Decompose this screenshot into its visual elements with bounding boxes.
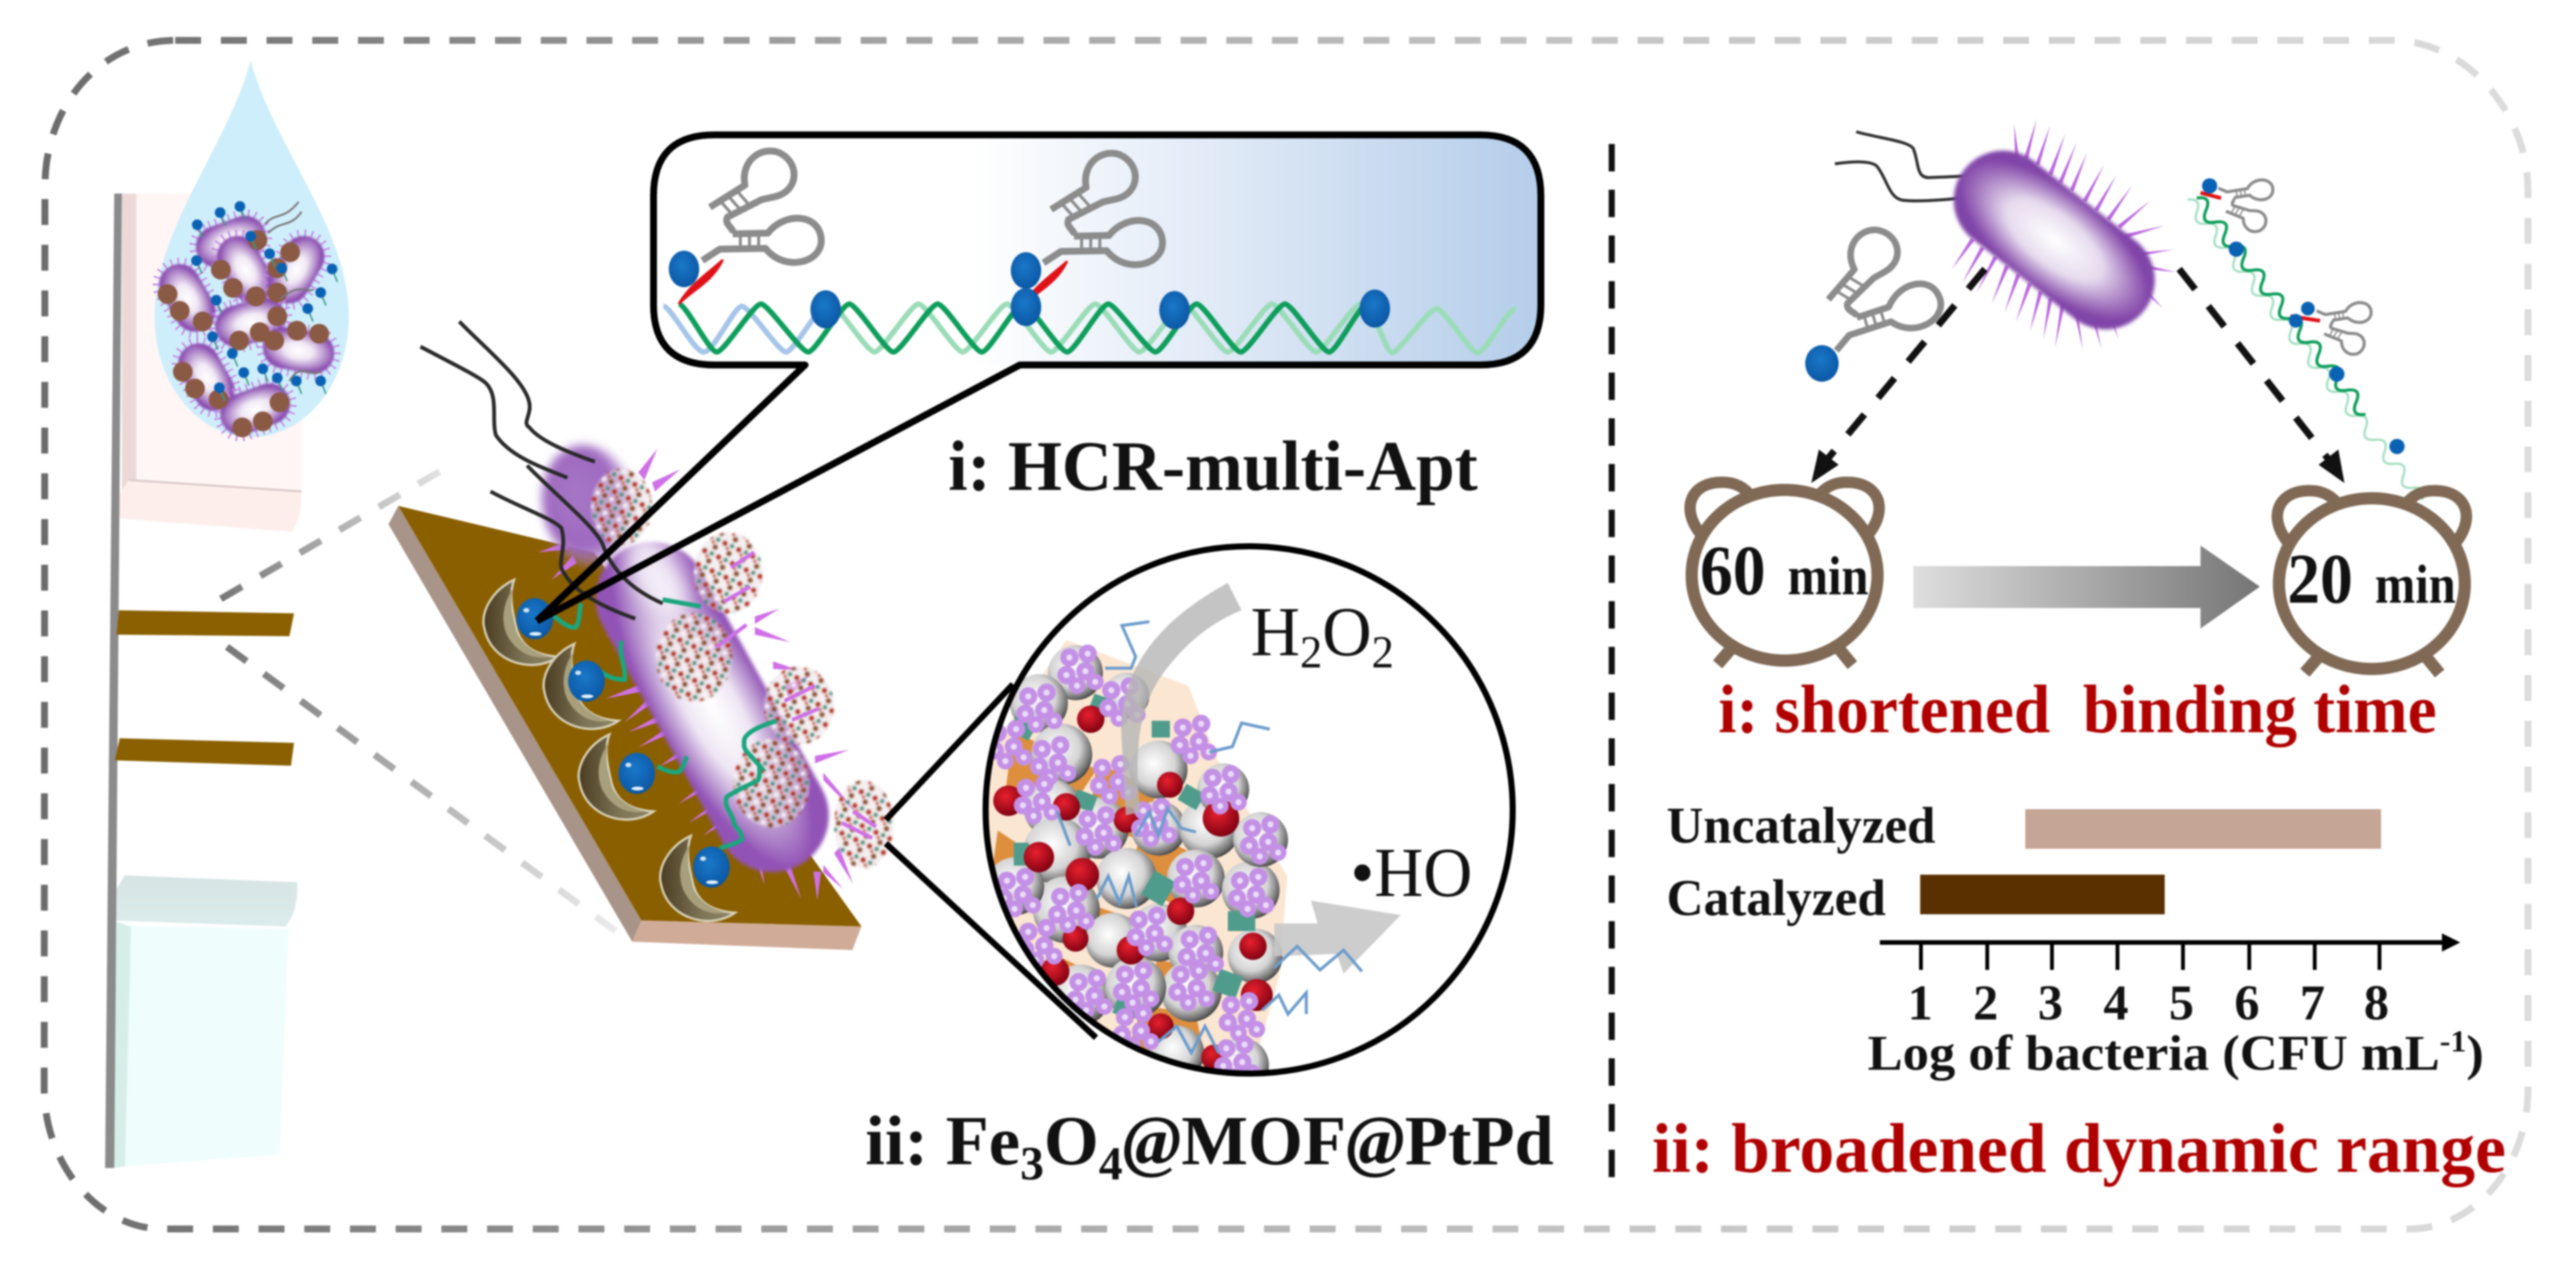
HO radical label: •HO: [1350, 834, 1472, 911]
dynamic range chart: [1667, 796, 2484, 1081]
dark DNA strand green: [679, 304, 1367, 352]
HCR multi-aptamer chain: [2183, 178, 2427, 504]
axis title: Log of bacteria (CFU mL: [1868, 1026, 2415, 1081]
min label left: min: [1788, 546, 1868, 606]
axis numbers: 4: [2104, 975, 2128, 1031]
light strand: [2183, 196, 2427, 504]
label uncatalyzed: Uncatalyzed: [1667, 796, 1935, 854]
sample pad flap: [114, 480, 302, 532]
gray progress arrow: [1913, 546, 2260, 629]
flagella: [420, 322, 663, 619]
callout fill: [654, 135, 1541, 365]
light DNA strand green: [830, 304, 1516, 353]
heading: Fe3O4@MOF@PtPd: ii: Fe: [865, 1102, 1019, 1179]
circle outline: [986, 546, 1513, 1074]
upper purple end: [529, 434, 652, 579]
nanoparticles on bacteria: [158, 230, 329, 437]
H2O2 label: 2: [1300, 627, 1322, 677]
20 label: 20: [2287, 540, 2353, 619]
blue beads: [669, 251, 1390, 329]
circle fill: [986, 546, 1513, 1074]
dashed zoom line upper: [221, 472, 439, 599]
absorbent pad side: [112, 922, 131, 1168]
detection plate: [388, 506, 861, 950]
axis numbers: 3: [2038, 975, 2063, 1031]
axis numbers: 2: [1973, 975, 1999, 1031]
label catalyzed: Catalyzed: [1667, 869, 1886, 926]
strip backing: [105, 194, 122, 1168]
callout: HCR-multi-Apt: [537, 135, 1541, 621]
catalytic nanoparticles: [591, 469, 893, 869]
red linker 2: [1023, 261, 1067, 306]
flap crease: [129, 480, 302, 491]
flagella: [1835, 132, 1979, 201]
heading: Fe3O4@MOF@PtPd: MOF@PtPd: [1181, 1102, 1553, 1179]
absorbent pad flap: [110, 875, 297, 926]
bacterium on plate: [420, 322, 893, 901]
callout outline with tail: [537, 135, 1541, 621]
spikes: [538, 449, 867, 901]
silver spheres: [986, 645, 1288, 1093]
spikes: [1950, 118, 2176, 350]
free hairpin aptamer: [1805, 216, 1946, 382]
test line: [117, 610, 294, 636]
teal squares: [1008, 693, 1255, 1019]
plate front side: [632, 920, 861, 950]
axis numbers: 7: [2300, 975, 2325, 1031]
green linker strands: [554, 600, 777, 848]
red spheres: [993, 706, 1273, 1070]
left dashed arrow: [1811, 269, 1985, 483]
heading: broadened dynamic range: ii: broadened dynamic range: [1652, 1109, 2506, 1187]
small hairpin 1: [2218, 178, 2280, 237]
H2O2 label: O: [1322, 593, 1372, 670]
heading: shortened binding time: i: shortened binding time: [1718, 672, 2437, 747]
nanoparticle on plate zoom lines: [886, 684, 1096, 1038]
purple metal clusters: [986, 645, 1286, 1085]
light DNA strand blue: [663, 306, 826, 352]
red linkers: [2200, 193, 2320, 321]
capture crescents: [484, 580, 735, 921]
H2O2 label: 2: [1372, 627, 1394, 677]
bar uncatalyzed: [2025, 809, 2381, 849]
blue aptamer beads: [191, 201, 337, 401]
control line: [115, 738, 294, 766]
drop shape: [155, 60, 349, 437]
water drop with bacteria: [149, 60, 349, 443]
axis: [1880, 933, 2460, 970]
heading: HCR-multi-Apt: i: HCR-multi-Apt: [948, 427, 1478, 506]
vertical divider: [1609, 144, 1615, 1177]
alarm clock 60 min: [1690, 482, 1879, 665]
plate top: [398, 506, 861, 926]
right dashed arrow: [2179, 269, 2344, 483]
sample pad side: [122, 194, 136, 503]
small blue beads: [2202, 178, 2405, 454]
pink spikes over nanoparticles: [716, 552, 876, 838]
hairpin aptamer 2: [1044, 153, 1162, 264]
blue beads on plate: [516, 598, 730, 888]
H2O2 label: H: [1251, 593, 1301, 670]
capsule body: [575, 522, 849, 892]
target bacterium: [1835, 118, 2176, 350]
outflow squiggle: [1274, 946, 1362, 971]
dashed zoom line lower: [227, 647, 618, 933]
axis numbers: 8: [2364, 975, 2389, 1031]
flagella: [265, 202, 320, 381]
small hairpin 2: [2316, 301, 2378, 360]
hairpin aptamer 1: [702, 151, 821, 262]
capsule highlight: [611, 519, 702, 627]
capsule body: [1934, 130, 2175, 350]
bar catalyzed: [1920, 875, 2165, 914]
axis title: -1: [2440, 1024, 2466, 1058]
test strip: [105, 194, 302, 1168]
axis numbers: 6: [2235, 975, 2259, 1031]
axis numbers: 5: [2169, 975, 2194, 1031]
gray H2O2 inflow arrow band: [1121, 583, 1242, 815]
particle interior: [983, 622, 1306, 1093]
plate left side: [388, 506, 641, 942]
red linker 1: [679, 260, 723, 304]
heading: Fe3O4@MOF@PtPd: 4: [1099, 1138, 1123, 1190]
bacteria cluster: [149, 207, 340, 443]
min label right: min: [2375, 554, 2456, 615]
heading: Fe3O4@MOF@PtPd: 3: [1020, 1138, 1044, 1190]
MOF orange patches: [990, 731, 1211, 1051]
60 label: 60: [1700, 532, 1766, 610]
dark strand: [2191, 194, 2371, 418]
sample pad: [114, 194, 302, 532]
blue DNA squiggles: [1057, 622, 1306, 1053]
heading: Fe3O4@MOF@PtPd: O: [1044, 1102, 1099, 1179]
magnified nanoparticle circle: [983, 546, 1513, 1093]
absorbent pad body: [125, 926, 289, 1166]
axis title: ): [2466, 1026, 2484, 1081]
heading: Fe3O4@MOF@PtPd: @: [1123, 1102, 1181, 1179]
axis numbers: 1: [1907, 975, 1933, 1031]
gray HO outflow arrow: [1274, 901, 1401, 974]
alarm clock 20 min: [2277, 491, 2466, 674]
MOF background: [983, 640, 1287, 1082]
axis numbers: [1907, 975, 2389, 1031]
